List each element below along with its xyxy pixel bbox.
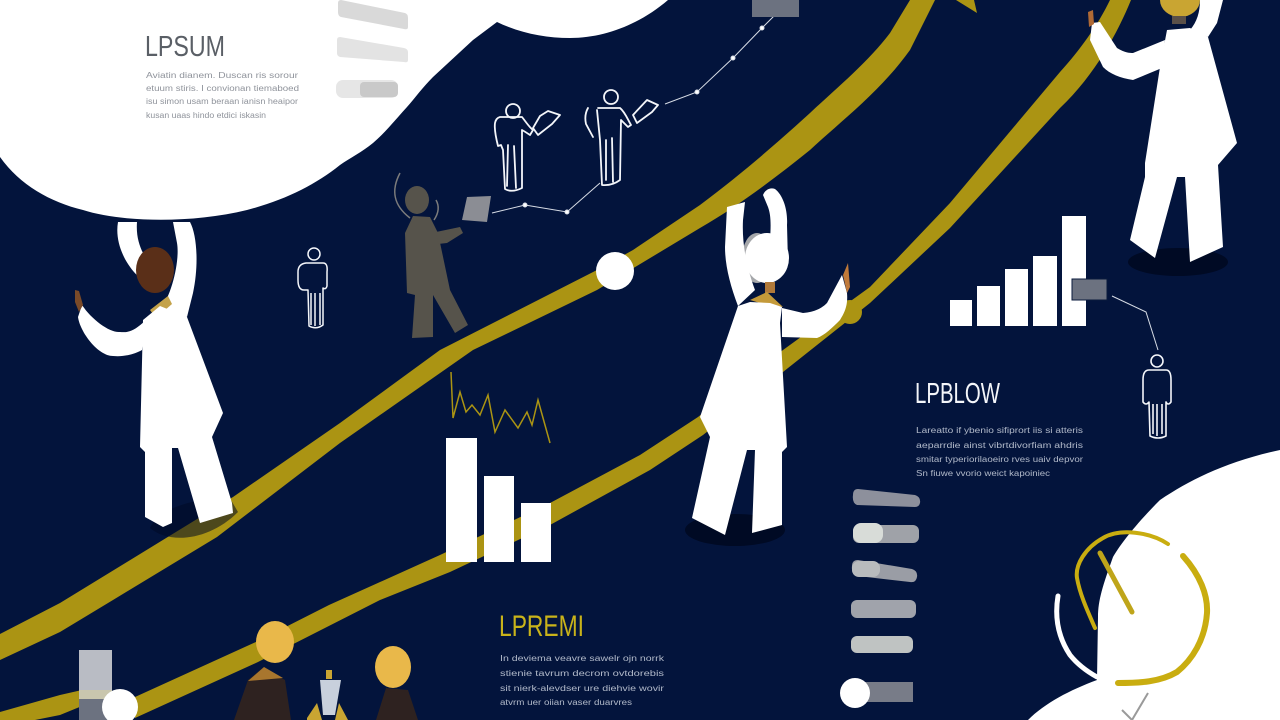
icon: top device xyxy=(752,0,799,17)
gold path: bottom-left stub xyxy=(0,690,82,720)
icon: gray check mark xyxy=(1122,693,1148,720)
text block: right body: aeparrdie ainst vibrtdivorfiam ahdris xyxy=(916,441,1083,450)
line sparkline: gold xyxy=(451,372,550,443)
text block: top-left body: Aviatin dianem. Duscan ris sorour xyxy=(146,71,298,80)
icon: bottom cup xyxy=(307,670,348,720)
gold path: upper band xyxy=(0,0,935,660)
node: white circle on upper band xyxy=(596,252,634,290)
icon: outline person 1 with book xyxy=(495,104,560,191)
text block: top-left body xyxy=(146,71,299,120)
heading: LPBLOW: LPBLOW xyxy=(915,378,1000,410)
list bars: right xyxy=(840,489,920,708)
connector: tablet to upper figures xyxy=(492,183,600,214)
figures: bottom-left container and node xyxy=(79,650,138,720)
figure: bottom person with gold head xyxy=(234,621,294,720)
text block: bottom body: stienie tavrum decrom ovtdorebis xyxy=(500,669,664,678)
icon: gold star fragment xyxy=(956,0,977,13)
text block: bottom body xyxy=(500,654,665,707)
figure: white person top right xyxy=(1088,0,1237,276)
connector: to top device xyxy=(665,15,775,104)
bar chart: center xyxy=(446,438,551,562)
figure: white person left xyxy=(75,222,238,538)
text block: top-left body: kusan uaas hindo etdici iskasin xyxy=(146,111,266,120)
white blob: top-left panel xyxy=(0,0,668,220)
icon: outline person right xyxy=(1143,355,1171,438)
text block: right body: smitar typeriorilaoeiro rves uaiv depvor xyxy=(916,455,1083,464)
text block: right body: Sn fiuwe vvorio weict kapoiniec xyxy=(916,469,1050,478)
icon: device on right chart xyxy=(1072,279,1107,300)
gold path: lower band xyxy=(135,0,1131,718)
text block: bottom body: atvrm uer oiian vaser duarvres xyxy=(500,698,632,707)
figure: white person center xyxy=(685,188,862,546)
white blob: bottom-right corner xyxy=(1028,450,1280,720)
text block: bottom body: In deviema veavre sawelr ojn norrk xyxy=(500,654,665,663)
bar chart: right xyxy=(950,216,1086,326)
list bars: top-left xyxy=(336,0,408,98)
icon: outline person 2 with book xyxy=(585,90,658,185)
text block: top-left body: isu simon usam beraan ianisn heaipor xyxy=(146,97,298,106)
icon: gold ring clock xyxy=(1077,532,1207,683)
icon: small outline person xyxy=(298,248,327,328)
figure: dark person with tablet xyxy=(395,173,491,338)
figure: bottom person right xyxy=(375,646,418,720)
text block: right body: Lareatto if ybenio sifiprort iis si atteris xyxy=(916,426,1083,435)
heading: LPSUM: LPSUM xyxy=(145,31,225,63)
text block: right body xyxy=(916,426,1083,478)
heading: LPREMI: LPREMI xyxy=(499,610,584,643)
text block: bottom body: sit nierk-alevdser ure diehvie wovir xyxy=(500,684,664,693)
icon: white hook stroke xyxy=(1057,596,1097,677)
text block: top-left body: etuum stiris. I convionan tiemaboed xyxy=(146,84,299,93)
connector: device to right person xyxy=(1112,296,1158,350)
